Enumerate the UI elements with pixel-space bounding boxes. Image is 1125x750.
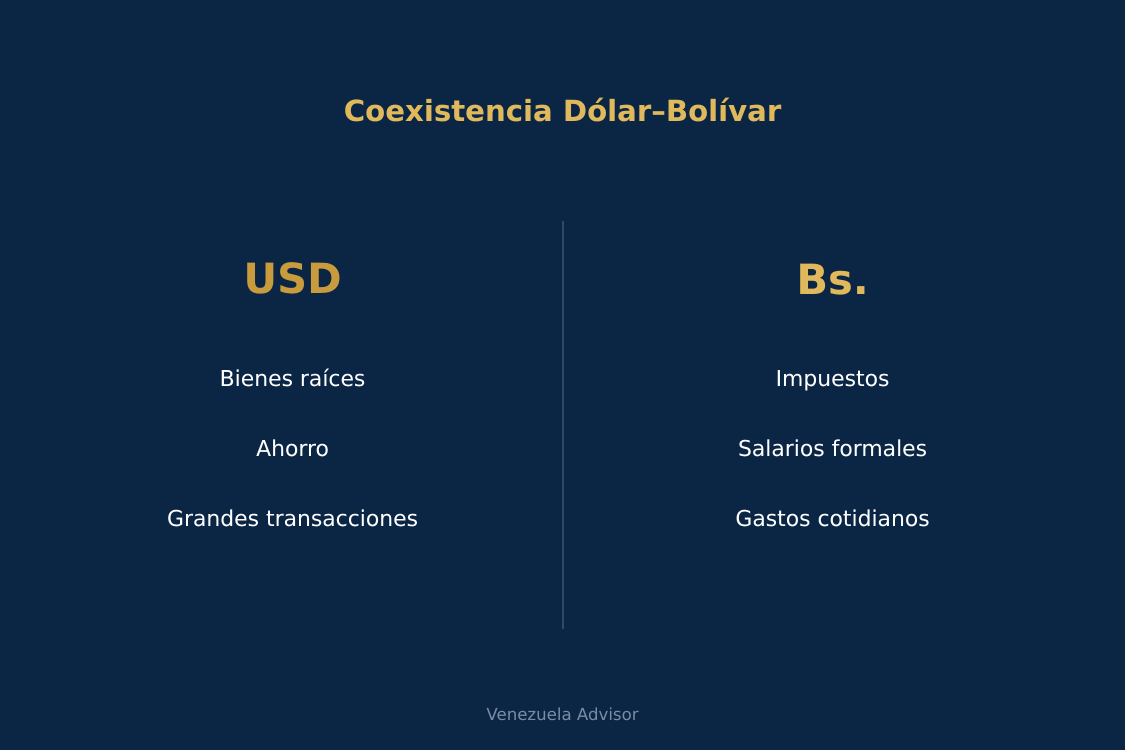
list item: Grandes transacciones: Grandes transacciones xyxy=(167,507,418,532)
heading: USD: USD xyxy=(243,254,342,303)
footer credit: Venezuela Advisor xyxy=(486,705,639,724)
panel: USD xyxy=(167,254,418,532)
list item: Bienes raíces: Bienes raíces xyxy=(220,367,365,392)
list item: Gastos cotidianos: Gastos cotidianos xyxy=(735,507,930,532)
list item: Salarios formales: Salarios formales xyxy=(738,437,927,462)
panel: Bs. xyxy=(735,255,930,532)
heading: Bs.: Bs. xyxy=(796,255,869,304)
title: Coexistencia Dólar–Bolívar xyxy=(344,94,782,128)
center divider xyxy=(562,221,564,629)
list item: Ahorro: Ahorro xyxy=(256,437,329,462)
list item: Impuestos: Impuestos xyxy=(776,367,889,392)
